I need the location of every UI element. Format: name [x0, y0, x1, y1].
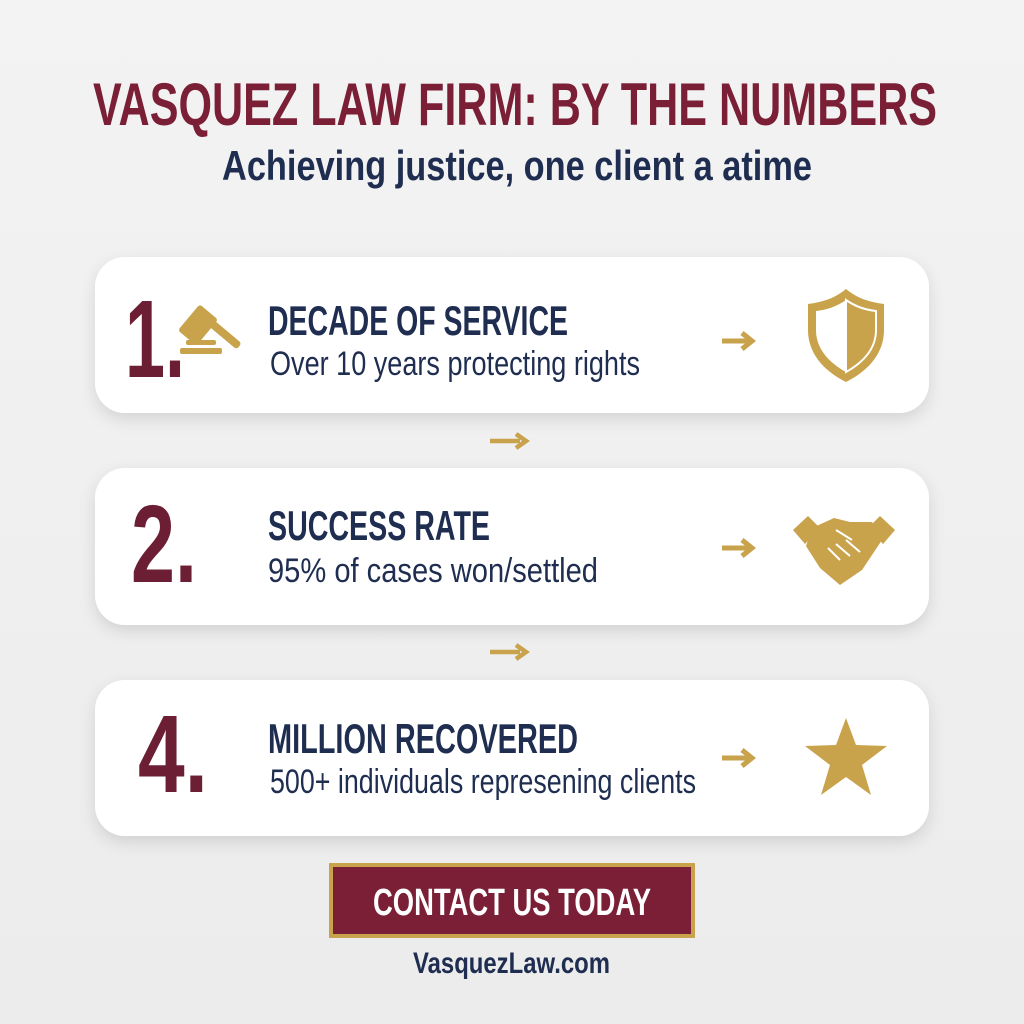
- panel: success rate: [95, 468, 929, 625]
- subtitle: Achieving justice, one client a atime: [222, 142, 812, 189]
- text: Over 10 years protecting rights: [270, 345, 640, 383]
- heading: SUCCESS RATE: [268, 502, 490, 549]
- number 1: 1.: [125, 278, 185, 401]
- arrow: [722, 750, 752, 766]
- icon: star: [805, 718, 887, 795]
- icon: gavel: [178, 304, 242, 354]
- number 2: 2.: [131, 483, 197, 606]
- button: contact us: CONTACT US TODAY: [373, 882, 651, 924]
- arrow: [722, 333, 752, 349]
- heading: MILLION RECOVERED: [268, 715, 578, 762]
- panel: million recovered: [95, 680, 929, 836]
- text: 95% of cases won/settled: [268, 552, 598, 590]
- heading: DECADE OF SERVICE: [268, 297, 568, 344]
- panel: decade of service: [95, 257, 929, 413]
- button: contact us: [331, 865, 693, 936]
- arrow: between 2 and 3: [490, 645, 526, 659]
- url: VasquezLaw.com: [413, 947, 610, 980]
- text: 500+ individuals represening clients: [270, 763, 696, 801]
- arrow: [722, 540, 752, 556]
- icon: shield: [808, 289, 884, 382]
- arrow: between 1 and 2: [490, 434, 526, 448]
- icon: handshake: [793, 516, 895, 585]
- number 4: 4.: [138, 693, 208, 816]
